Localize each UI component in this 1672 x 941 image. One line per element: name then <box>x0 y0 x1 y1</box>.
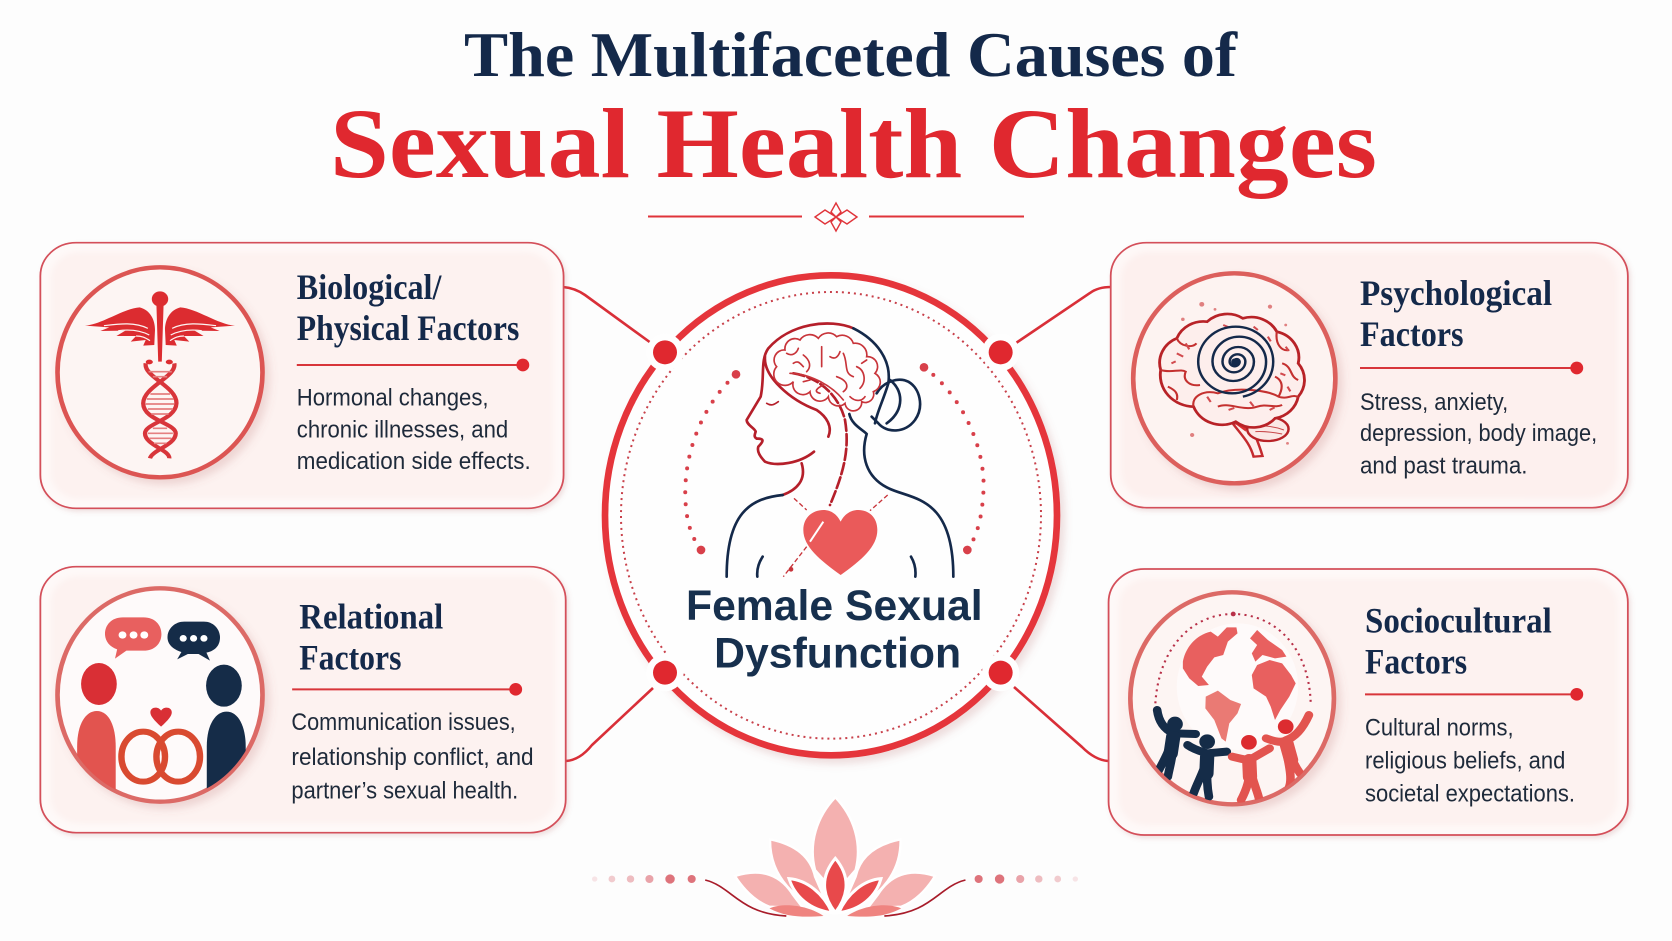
central circle: female sexual dysfunction: Female Sexual <box>686 582 983 630</box>
brain detail <box>774 333 880 411</box>
panel: sociocultural factors: Sociocultural <box>1365 601 1552 641</box>
panel: biological/physical factors <box>40 243 564 508</box>
panel: psychological factors <box>1111 243 1628 508</box>
panel: relational factors: Communication issues, <box>291 709 516 736</box>
bottom lotus ornament <box>592 797 1078 917</box>
icon: heart <box>783 495 888 577</box>
central circle: female sexual dysfunction <box>605 275 1057 755</box>
panel: sociocultural factors: societal expectations. <box>1365 780 1575 807</box>
panel: psychological factors: depression, body image, <box>1360 420 1597 447</box>
panel: sociocultural factors: Factors <box>1365 642 1467 682</box>
panel: relational factors: partner’s sexual health. <box>291 777 518 804</box>
title: second line: Sexual Health Changes <box>330 88 1377 199</box>
panel: psychological factors: Factors <box>1360 315 1464 355</box>
panel: psychological factors: Psychological <box>1360 274 1552 314</box>
connector lines from center to cards <box>563 287 1111 761</box>
icon: caduceus with DNA helix <box>57 267 262 477</box>
panel: sociocultural factors: religious beliefs, and <box>1365 747 1565 774</box>
panel: relational factors <box>40 567 566 833</box>
panel: biological/physical factors: Biological/ <box>297 268 442 308</box>
panel: relational factors: relationship conflict, and <box>291 744 534 771</box>
central circle: female sexual dysfunction: Dysfunction <box>714 629 961 677</box>
dotted arcs around the figure <box>685 363 984 554</box>
icon: couple with speech bubbles and rings <box>57 588 262 802</box>
panel: biological/physical factors: medication side effects. <box>297 448 531 475</box>
panel: psychological factors: and past trauma. <box>1360 452 1527 479</box>
panel: biological/physical factors: chronic illnesses, and <box>297 416 508 443</box>
panel: biological/physical factors: Hormonal changes, <box>297 384 489 411</box>
title: first line: The Multifaceted Causes of <box>464 20 1238 90</box>
icon: woman profile with brain and heart <box>727 324 953 577</box>
panel: sociocultural factors: Cultural norms, <box>1365 714 1514 741</box>
panel: biological/physical factors: Physical Factors <box>297 309 519 349</box>
title divider ornament <box>648 203 1024 231</box>
panel: relational factors: Relational <box>299 598 443 637</box>
panel: psychological factors: Stress, anxiety, <box>1360 389 1508 416</box>
panel: relational factors: Factors <box>299 638 401 678</box>
icon: brain with spiral <box>1133 273 1335 483</box>
icon: globe with people <box>1130 592 1334 804</box>
panel: sociocultural factors <box>1109 569 1628 835</box>
